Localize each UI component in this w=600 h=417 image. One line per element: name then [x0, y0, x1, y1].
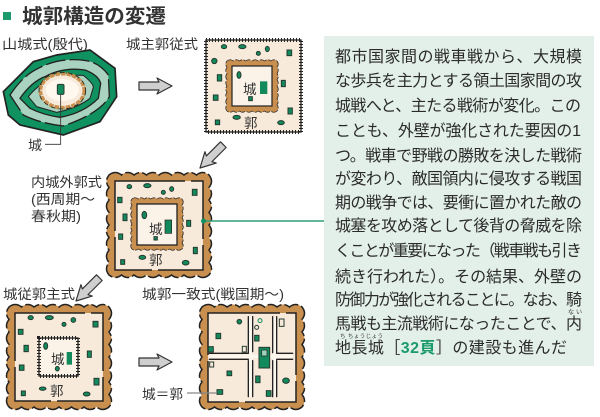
arrow: castle-subordinate to unified — [139, 354, 172, 370]
label: inner-outer type — [31, 175, 103, 224]
diagram: castle-main outer enclosure: 城 — [243, 82, 257, 97]
label: inner-outer type: 内城外郭式 — [31, 175, 103, 190]
diagram: castle-main outer enclosure: 郭 — [244, 116, 258, 131]
panel: explanatory text: ち ちょうじょう — [340, 333, 383, 340]
arrow: mountain castle to castle-main — [139, 78, 172, 94]
label: castle equals enclosure: 城＝郭 — [142, 387, 183, 402]
label: castle: 城 — [28, 138, 43, 153]
label: unified type: 城郭一致式(戦国期～) — [142, 287, 284, 302]
panel: explanatory text: ない — [568, 309, 582, 316]
title: 城郭構造の変遷 — [22, 5, 166, 28]
panel: explanatory text: くことが重要になった（戦車戦も引き — [335, 242, 582, 260]
panel: explanatory text: が変わり、敵国領内に侵攻する戦国 — [335, 170, 582, 188]
diagram: inner-outer enclosure: 郭 — [149, 253, 162, 268]
diagram: castle-subordinate enclosure: 城 — [51, 352, 65, 367]
label: castle-subordinate type: 城従郭主式 — [3, 287, 76, 302]
label: mountain castle type: 山城式(殷代) — [2, 37, 88, 52]
panel: explanatory text: 期の戦争では、要衝に置かれた敵の — [335, 194, 582, 212]
panel: explanatory text — [324, 36, 594, 366]
diagram: inner-outer enclosure: 城 — [149, 222, 163, 237]
panel: explanatory text: 城戦へと、主たる戦術が変化。この — [335, 97, 581, 115]
label: inner-outer type: 春秋期) — [31, 209, 81, 224]
panel: explanatory text: 地長城［32頁］の建設も進んだ — [335, 339, 567, 357]
panel: explanatory text: 防御力が強化されることに。なお、騎 — [335, 291, 582, 309]
panel: explanatory text: 馬戦も主流戦術になったことで、内 — [335, 315, 582, 333]
panel: explanatory text: 続き行われた）。その結果、外壁の — [335, 268, 582, 286]
diagram: castle-subordinate enclosure: 郭 — [50, 384, 64, 399]
connector line to text panel — [201, 218, 326, 224]
diagram: mountain castle — [3, 50, 117, 144]
arrow: castle-main to inner-outer — [194, 139, 229, 174]
panel: explanatory text: な歩兵を主力とする領土国家間の攻 — [335, 72, 582, 90]
panel: explanatory text: 城塞を攻め落として後背の脅威を除 — [335, 217, 582, 235]
label: castle-main type: 城主郭従式 — [126, 37, 199, 52]
panel: explanatory text: ことも、外壁が強化された要因の1 — [335, 122, 581, 140]
panel: explanatory text: つ。戦車で野戦の勝敗を決した戦術 — [335, 147, 582, 165]
arrow: inner-outer to castle-subordinate — [70, 272, 105, 307]
diagram: castle-subordinate enclosure — [6, 304, 112, 410]
label: castle equals enclosure — [142, 387, 217, 402]
diagram: inner-outer enclosure — [106, 172, 212, 278]
diagram: unified enclosure — [200, 304, 304, 410]
label: inner-outer type: (西周期～ — [31, 192, 95, 207]
diagram: castle-main outer enclosure — [206, 40, 301, 132]
panel: explanatory text: 都市国家間の戦車戦から、大規模 — [335, 48, 582, 66]
